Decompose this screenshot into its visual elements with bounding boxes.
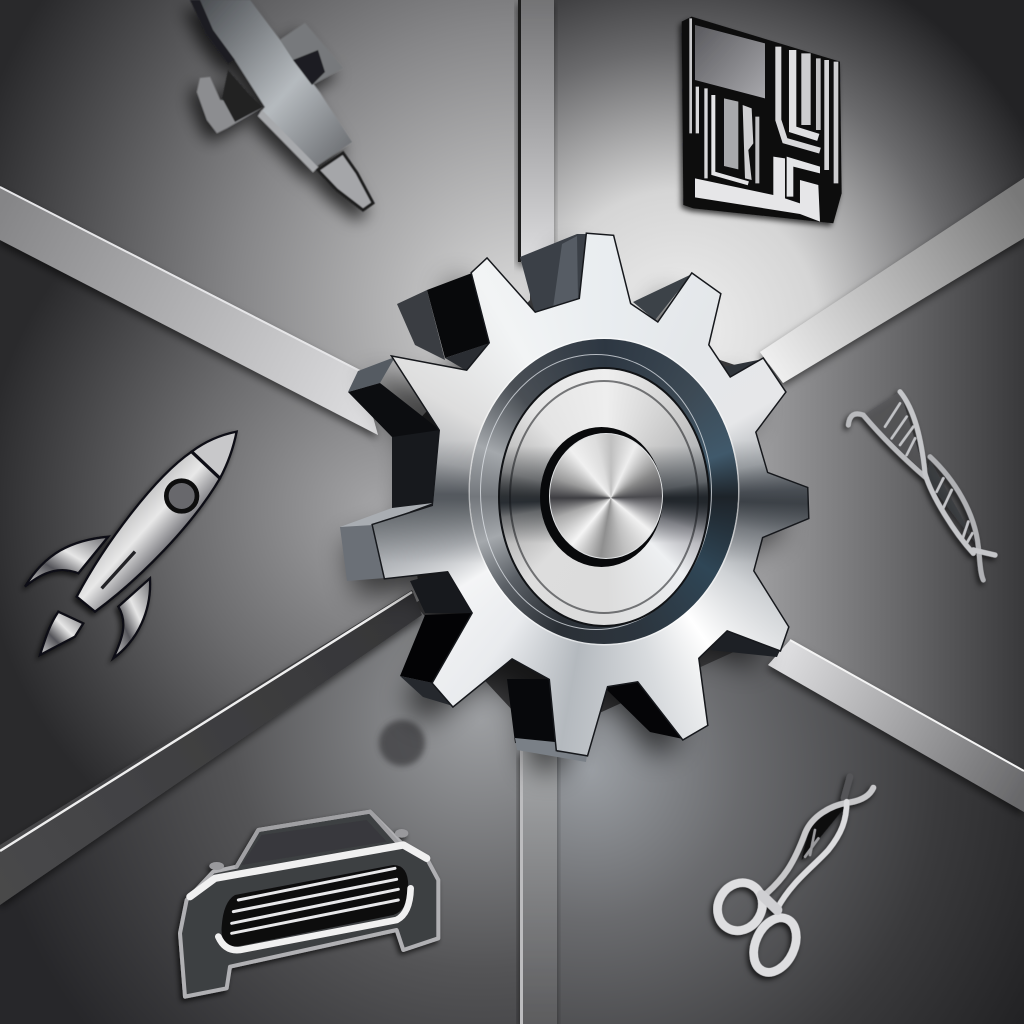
panel: bottom left [0,600,540,1024]
inner disc [498,367,710,627]
gear face [373,234,808,755]
icon: circuit chip [682,17,842,223]
dark spot [379,720,425,766]
panel: top left [0,0,530,440]
bar: lower left [0,590,422,905]
bar: bottom [520,750,557,1024]
thin inner ring line [480,354,712,630]
central gear [331,232,810,788]
hub base [540,427,663,567]
panel: left [0,220,420,880]
bar: lower right [768,640,1024,812]
icon: car [180,812,438,997]
outer dark ring [470,339,738,644]
bar: top [518,0,554,262]
icon: DNA helix [848,392,995,580]
bar: upper right [760,178,1024,383]
bar: upper left [0,186,378,435]
panel: top right [540,0,1024,380]
icon: rocket [25,432,237,658]
panel: bottom right [540,640,1024,1024]
icon: plane [190,0,373,210]
concentric groove [509,380,699,614]
panel: right [740,200,1024,800]
hub button [549,433,663,559]
icon: scissors [709,777,873,979]
